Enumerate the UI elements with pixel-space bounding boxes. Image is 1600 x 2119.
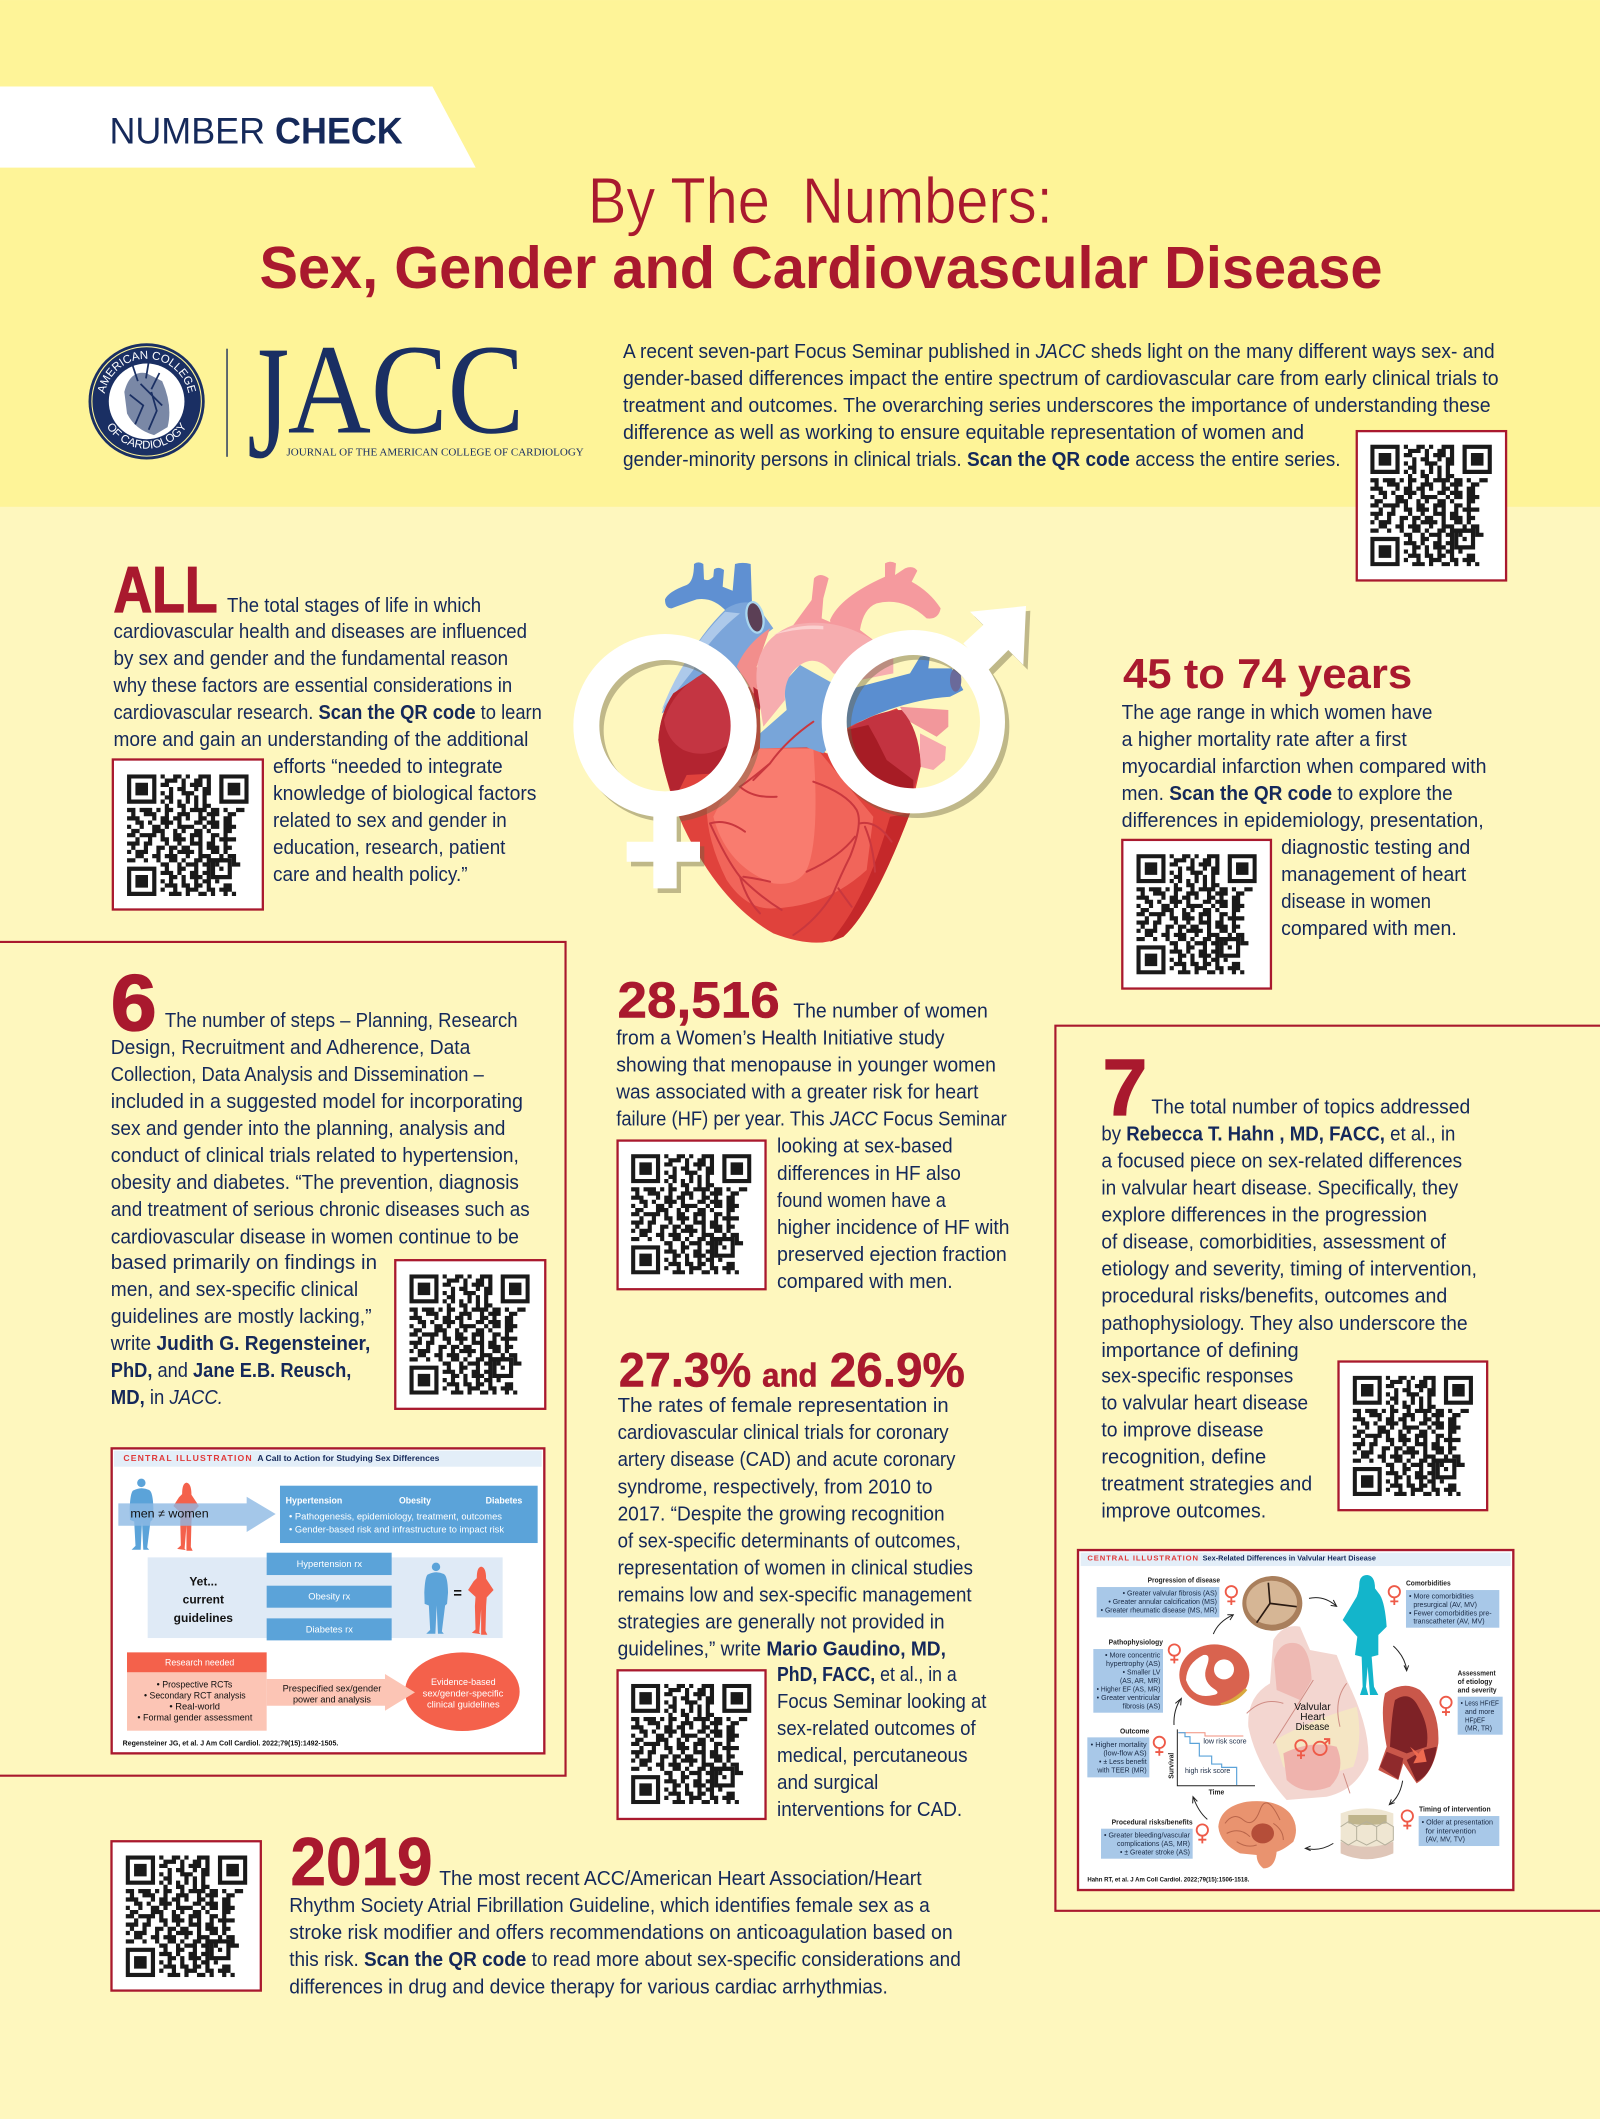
text: female representation description: of sex-specific determinants of outcomes, (618, 1530, 961, 1552)
text: ALL description (113, 595, 542, 886)
box: research needed (127, 1652, 267, 1731)
text: clinical trial steps: obesity and diabetes. “The prevention, diagnosis (111, 1172, 519, 1194)
text: clinical trial steps: sex and gender into the planning, analysis and (111, 1118, 505, 1140)
panel: 27.3% and 26.9% (618, 1344, 987, 1821)
text: clinical trial steps: Collection, Data Analysis and Dissemination – (111, 1064, 484, 1086)
text: female representation description: artery disease (CAD) and acute coronary (618, 1449, 956, 1471)
banner: Number Check: NUMBER CHECK (109, 109, 403, 151)
block: procedural risks and benefits (1101, 1817, 1208, 1859)
text: valvular heart disease description: by Rebecca T. Hahn , MD, FACC, et al., in (1101, 1124, 1455, 1146)
text: ALL description: related to sex and gender in (273, 810, 507, 832)
block: progression of disease (1097, 1576, 1237, 1617)
text: ALL description: by sex and gender and the fundamental reason (114, 648, 508, 670)
icon: brain (1218, 1801, 1296, 1868)
text: clinical trial steps: PhD, and Jane E.B. Reusch, (111, 1360, 351, 1382)
block: assessment of etiology and severity: and severity (1458, 1686, 1497, 1695)
panel: 2019 (111, 1825, 961, 1998)
text: clinical trial steps (110, 1010, 530, 1409)
block: pathophysiology (1093, 1638, 1180, 1713)
header: central illustration: CENTRAL ILLUSTRATION (123, 1453, 252, 1463)
text: valvular heart disease description: to valvular heart disease (1101, 1393, 1308, 1415)
text: valvular heart disease description: recognition, define (1101, 1447, 1266, 1469)
text: valvular heart disease description: of disease, comorbidities, assessment of (1101, 1232, 1446, 1254)
text: female representation description: representation of women in clinical studies (618, 1557, 973, 1579)
text: ALL description: care and health policy.” (273, 864, 468, 886)
header: central illustration (114, 1451, 542, 1467)
text: female representation description: interventions for CAD. (777, 1799, 962, 1821)
block: outcome: with TEER (MR) (1096, 1765, 1147, 1774)
block: pathophysiology: • Greater ventricular (1097, 1693, 1161, 1702)
logo: American College of Cardiology seal: OF CARDIOLOGY (108, 422, 185, 449)
text: clinical trial steps: The number of steps – Planning, Research (165, 1010, 518, 1032)
text: age range description: diagnostic testing and (1281, 837, 1470, 859)
text: AF guideline description: differences in drug and device therapy for various cardiac arrhythmias. (289, 1976, 888, 1998)
block: assessment of etiology and severity: HFpEF (1465, 1715, 1485, 1724)
icon: ventricle cross-section (1179, 1644, 1249, 1706)
text: clinical trial steps: write Judith G. Regensteiner, (110, 1333, 370, 1355)
text: clinical trial steps: based primarily on findings in (111, 1252, 377, 1274)
intro text: gender-minority persons in clinical trials. Scan the QR code access the entire series. (623, 449, 1341, 471)
block: outcome: • ± Less benefit (1099, 1757, 1147, 1766)
stat: 45 to 74 years: 45 to 74 years (1123, 650, 1412, 697)
stat: 28,516: 28,516 (618, 972, 780, 1029)
text: female representation description: 2017. “Despite the growing recognition (618, 1503, 945, 1525)
box: conditions: Diabetes (486, 1495, 522, 1505)
heart drawing: Valvular (1294, 1702, 1331, 1713)
block: procedural risks and benefits: complications (AS, MR) (1117, 1839, 1190, 1848)
banner: Number Check (0, 87, 476, 168)
text: valvular heart disease description: improve outcomes. (1101, 1501, 1266, 1523)
text: female representation description: syndrome, respectively, from 2010 to (618, 1476, 932, 1498)
text: valvular heart disease description: to improve disease (1101, 1420, 1264, 1442)
icon: left ventricle dissection (1378, 1686, 1438, 1783)
QR code: ALL (113, 760, 263, 910)
text: valvular heart disease description: sex-specific responses (1101, 1365, 1293, 1387)
title: By The Numbers: (588, 164, 1053, 237)
callout: evidence-based guidelines: clinical guidelines (427, 1699, 500, 1709)
intro text: difference as well as working to ensure equitable representation of women and (623, 422, 1304, 444)
text: ALL description: cardiovascular research. Scan the QR code to learn (114, 702, 542, 724)
logo: American College of Cardiology seal: AMERICAN COLLEGE (98, 350, 196, 394)
heart drawing: Heart (1300, 1712, 1325, 1723)
box: current guidelines: Yet... (189, 1574, 217, 1588)
text: AF guideline description: The most recent ACC/American Heart Association/Heart (439, 1868, 922, 1890)
block: outcome (1087, 1726, 1165, 1777)
box: current guidelines: Hypertension rx (297, 1559, 362, 1569)
text: Women's Health Initiative description: was associated with a greater risk for heart (615, 1082, 979, 1104)
block: timing of intervention: • Older at presentation (1422, 1818, 1493, 1827)
block: assessment of etiology and severity: of etiology (1458, 1677, 1493, 1686)
text: ALL description: knowledge of biological factors (273, 783, 536, 805)
block: pathophysiology: • Higher EF (AS, MR) (1097, 1685, 1161, 1694)
text: Women's Health Initiative description: looking at sex-based (777, 1136, 953, 1158)
text: Women's Health Initiative description: from a Women’s Health Initiative study (616, 1028, 945, 1050)
icon: male symbol (822, 606, 1026, 813)
panel: 28,516 (615, 972, 1009, 1293)
panel: ALL (113, 553, 542, 910)
text: female representation description: medical, percutaneous (777, 1745, 968, 1767)
text: valvular heart disease description: treatment strategies and (1101, 1474, 1312, 1496)
text: clinical trial steps: men, and sex-specific clinical (111, 1279, 358, 1301)
stat: 7: 7 (1103, 1043, 1147, 1132)
text: female representation description: PhD, FACC, et al., in a (777, 1664, 957, 1686)
text: age range description: disease in women (1281, 891, 1431, 913)
text: valvular heart disease description: explore differences in the progression (1101, 1205, 1427, 1227)
text: clinical trial steps: conduct of clinical trials related to hypertension, (111, 1145, 519, 1167)
text: female representation description: sex-related outcomes of (777, 1718, 976, 1740)
heart drawing (1247, 1626, 1368, 1800)
header: central illustration: Sex-Related Differences in Valvular Heart Disease (1203, 1554, 1376, 1563)
block: timing of intervention: for intervention (1426, 1826, 1476, 1835)
text: Women's Health Initiative description: higher incidence of HF with (777, 1217, 1009, 1239)
box: current guidelines: guidelines (174, 1611, 233, 1625)
box: research needed: • Prospective RCTs (157, 1679, 233, 1689)
illustration: call to action for studying sex differences (112, 1448, 544, 1753)
block: pathophysiology: • Smaller LV (1123, 1668, 1161, 1677)
heart drawing: Disease (1296, 1722, 1330, 1733)
block: assessment of etiology and severity (1440, 1669, 1503, 1735)
block: pathophysiology: Pathophysiology (1109, 1638, 1164, 1647)
block: pathophysiology: fibrosis (AS) (1123, 1701, 1161, 1710)
text: female representation description: remains low and sex-specific management (618, 1584, 972, 1606)
header: central illustration: A Call to Action for Studying Sex Differences (257, 1453, 440, 1463)
text: AF guideline description: stroke risk modifier and offers recommendations on anticoagulation based on (289, 1922, 953, 1944)
text: age range description: myocardial infarction when compared with (1122, 756, 1486, 778)
box: research needed: • Formal gender assessment (137, 1713, 253, 1723)
text: valvular heart disease description: etiology and severity, timing of intervention, (1101, 1259, 1477, 1281)
block: outcome: (low-flow AS) (1103, 1748, 1147, 1757)
text: Women's Health Initiative description: differences in HF also (777, 1163, 961, 1185)
text: age range description: a higher mortality rate after a first (1122, 729, 1407, 751)
box: conditions: Obesity (399, 1495, 431, 1505)
illustration: heart with sex symbols (573, 562, 1030, 943)
text: valvular heart disease description: procedural risks/benefits, outcomes and (1101, 1286, 1447, 1308)
intro text (623, 341, 1499, 471)
arrow: power and analysis (267, 1674, 415, 1711)
box: conditions: • Pathogenesis, epidemiology, treatment, outcomes (289, 1511, 503, 1521)
block: comorbidities: • More comorbidities (1409, 1591, 1474, 1600)
chart: survival curves: high risk score (1185, 1766, 1230, 1775)
text: female representation description: The rates of female representation in (618, 1395, 949, 1417)
text: valvular heart disease description (1101, 1097, 1477, 1523)
stat: 27.3% and 26.9%: 26.9% (830, 1344, 965, 1398)
box: current guidelines (148, 1553, 503, 1640)
header: central illustration: CENTRAL ILLUSTRATION (1087, 1554, 1198, 1563)
text: age range description: management of heart (1281, 864, 1467, 886)
stat: 27.3% and 26.9% (619, 1344, 965, 1398)
text: female representation description: Focus Seminar looking at (777, 1691, 987, 1713)
chart: survival curves: Survival (1167, 1753, 1176, 1779)
text: female representation description: cardiovascular clinical trials for coronary (618, 1422, 949, 1444)
callout: evidence-based guidelines: sex/gender-specific (423, 1688, 504, 1698)
text: ALL description: education, research, patient (273, 837, 506, 859)
stat: 2019: 2019 (291, 1825, 432, 1900)
block: timing of intervention (1402, 1805, 1499, 1846)
block: procedural risks and benefits: • ± Greater stroke (AS) (1120, 1847, 1190, 1856)
stat: 27.3% and 26.9%: 27.3% (619, 1344, 751, 1398)
text: clinical trial steps: MD, in JACC. (111, 1387, 223, 1409)
box: current guidelines: Diabetes rx (306, 1624, 353, 1634)
box: conditions (280, 1486, 538, 1543)
block: comorbidities (1389, 1578, 1499, 1628)
figures: men and women: men ≠ women (130, 1508, 209, 1521)
citation: Hahn RT, et al. J Am Coll Cardiol. 2022;79(15):1506-1518. (1087, 1876, 1249, 1883)
panel: 7 (1055, 1026, 1600, 1911)
logo: JACC wordmark: ACC (288, 318, 524, 460)
shadow: sex symbols (578, 611, 1030, 893)
text: valvular heart disease description: a focused piece on sex-related differences (1101, 1151, 1462, 1173)
box: current guidelines: = (453, 1586, 462, 1602)
QR code: 7 (1339, 1362, 1487, 1510)
block: procedural risks and benefits: Procedural risks/benefits (1112, 1817, 1193, 1826)
block: assessment of etiology and severity: and more (1465, 1707, 1494, 1716)
text: Women's Health Initiative description: showing that menopause in younger women (616, 1055, 996, 1077)
illustration: sex-related differences in valvular heart disease (1078, 1550, 1513, 1890)
QR code: 45 to 74 years (1122, 840, 1271, 989)
text: age range description (1122, 702, 1486, 940)
text: AF guideline description (289, 1868, 961, 1998)
text: ALL description: more and gain an understanding of the additional (114, 729, 528, 751)
text: female representation description: and surgical (777, 1772, 878, 1794)
panel: 6 (0, 942, 566, 1776)
text: female representation description: strategies are generally not provided in (618, 1611, 945, 1633)
block: timing of intervention: (AV, MV, TV) (1426, 1835, 1465, 1844)
block: progression of disease: • Greater valvular fibrosis (AS) (1123, 1588, 1217, 1597)
text: Women's Health Initiative description: compared with men. (777, 1271, 953, 1293)
block: assessment of etiology and severity: Assessment (1458, 1669, 1496, 1678)
stat: ALL: ALL (114, 553, 218, 626)
arrow: power and analysis: power and analysis (293, 1695, 371, 1705)
text: valvular heart disease description: pathophysiology. They also underscore the (1101, 1313, 1468, 1335)
text: Women's Health Initiative description: failure (HF) per year. This JACC Focus Seminar (616, 1109, 1007, 1131)
block: progression of disease: • Greater rheumatic disease (MS, MR) (1101, 1605, 1217, 1614)
text: Women's Health Initiative description: found women have a (777, 1190, 947, 1212)
icon: female symbol (573, 634, 757, 888)
block: pathophysiology: (AS, AR, MR) (1120, 1676, 1161, 1685)
citation: Regensteiner JG, et al. J Am Coll Cardiol. 2022;79(15):1492-1505. (123, 1740, 338, 1747)
panel border (0, 942, 566, 1776)
icon: transcatheter valve (1341, 1808, 1393, 1859)
text: age range description: differences in epidemiology, presentation, (1122, 810, 1484, 832)
text: age range description: compared with men. (1281, 918, 1457, 940)
block: progression of disease: • Greater annular calcification (MS) (1108, 1597, 1217, 1606)
block: comorbidities: transcatheter (AV, MV) (1413, 1617, 1485, 1626)
intro text: treatment and outcomes. The overarching series underscores the importance of understanding these (623, 395, 1491, 417)
text: valvular heart disease description: importance of defining (1101, 1340, 1299, 1362)
box: conditions: • Gender-based risk and infrastructure to impact risk (289, 1525, 505, 1535)
block: timing of intervention: Timing of intervention (1419, 1805, 1491, 1814)
text: clinical trial steps: Design, Recruitment and Adherence, Data (111, 1037, 471, 1059)
icon: woman silhouette (1343, 1575, 1387, 1695)
block: outcome: • Higher mortality (1091, 1740, 1147, 1749)
QR code: 6 (395, 1260, 545, 1409)
text: valvular heart disease description: The total number of topics addressed (1151, 1097, 1470, 1119)
text: Women's Health Initiative description: The number of women (793, 1001, 988, 1023)
QR code: 2019 (111, 1841, 261, 1991)
text: ALL description: cardiovascular health and diseases are influenced (114, 621, 527, 643)
text: female representation description: guidelines,” write Mario Gaudino, MD, (618, 1638, 946, 1660)
block: progression of disease: Progression of disease (1148, 1576, 1220, 1585)
box: current guidelines: Obesity rx (308, 1592, 351, 1602)
QR code: 28,516 (618, 1141, 766, 1289)
block: outcome: Outcome (1120, 1726, 1149, 1735)
box: research needed: Research needed (165, 1657, 234, 1667)
block: assessment of etiology and severity: (MR, TR) (1465, 1724, 1492, 1733)
text: valvular heart disease description: in valvular heart disease. Specifically, they (1101, 1178, 1459, 1200)
logo: JACC wordmark: JOURNAL OF THE AMERICAN COLLEGE OF CARDIOLOGY (286, 446, 584, 458)
block: comorbidities: Comorbidities (1406, 1578, 1451, 1587)
QR code: intro (1357, 431, 1506, 580)
title (259, 164, 1382, 301)
text: AF guideline description: Rhythm Society Atrial Fibrillation Guideline, which identifies female sex as a (289, 1895, 930, 1917)
divider (226, 349, 228, 457)
callout: evidence-based guidelines (405, 1652, 520, 1731)
text: ALL description: The total stages of life in which (227, 595, 481, 617)
block: assessment of etiology and severity: • Less HFrEF (1461, 1699, 1499, 1708)
header: central illustration (1081, 1553, 1511, 1566)
text: ALL description: why these factors are essential considerations in (113, 675, 512, 697)
text: clinical trial steps: included in a suggested model for incorporating (111, 1091, 523, 1113)
intro text: A recent seven-part Focus Seminar published in JACC sheds light on the many different ways sex- and (623, 341, 1495, 363)
intro text: gender-based differences impact the entire spectrum of cardiovascular care from early clinical trials to (623, 368, 1499, 390)
text: clinical trial steps: and treatment of serious chronic diseases such as (111, 1199, 530, 1221)
block: pathophysiology: hypertrophy (AS) (1106, 1659, 1161, 1668)
box: conditions: Hypertension (286, 1495, 342, 1505)
panel border (1055, 1026, 1600, 1911)
arrows: cycle (1174, 1598, 1409, 1851)
block: comorbidities: presurgical (AV, MV) (1413, 1600, 1477, 1609)
stat: 27.3% and 26.9%: and (762, 1357, 818, 1395)
stat: 6: 6 (111, 958, 157, 1047)
callout: evidence-based guidelines: Evidence-based (431, 1677, 496, 1687)
text: ALL description: efforts “needed to integrate (273, 756, 503, 778)
text: age range description: men. Scan the QR code to explore the (1122, 783, 1453, 805)
box: current guidelines: current (183, 1593, 224, 1607)
logo: JACC wordmark: J (247, 313, 289, 493)
text: AF guideline description: this risk. Scan the QR code to read more about sex-specific considerations and (289, 1949, 961, 1971)
icon: aortic valve (1242, 1576, 1302, 1631)
text: clinical trial steps: guidelines are mostly lacking,” (111, 1306, 372, 1328)
text: female representation description (618, 1395, 987, 1821)
title: Sex, Gender and Cardiovascular Disease (259, 234, 1382, 301)
chart: survival curves (1167, 1729, 1255, 1796)
logo: American College of Cardiology seal (88, 343, 205, 460)
text: age range description: The age range in which women have (1122, 702, 1432, 724)
block: comorbidities: • Fewer comorbidities pre- (1409, 1608, 1492, 1617)
chart: survival curves: Time (1209, 1787, 1224, 1796)
panel: 45 to 74 years (1122, 650, 1486, 989)
figures: men and women (118, 1479, 276, 1551)
text: Women's Health Initiative description (615, 1001, 1009, 1293)
box: research needed: • Secondary RCT analysis (144, 1690, 246, 1700)
block: procedural risks and benefits: • Greater bleeding/vascular (1104, 1830, 1190, 1839)
text: clinical trial steps: cardiovascular disease in women continue to be (111, 1226, 519, 1248)
box: research needed: • Real-world (169, 1701, 220, 1711)
block: pathophysiology: • More concentric (1105, 1650, 1160, 1659)
chart: survival curves: low risk score (1203, 1737, 1247, 1746)
arrow: power and analysis: Prespecified sex/gender (283, 1684, 381, 1694)
text: Women's Health Initiative description: preserved ejection fraction (777, 1244, 1007, 1266)
logo: JACC wordmark (247, 313, 584, 493)
QR code: 27.3% and 26.9% (618, 1670, 766, 1819)
